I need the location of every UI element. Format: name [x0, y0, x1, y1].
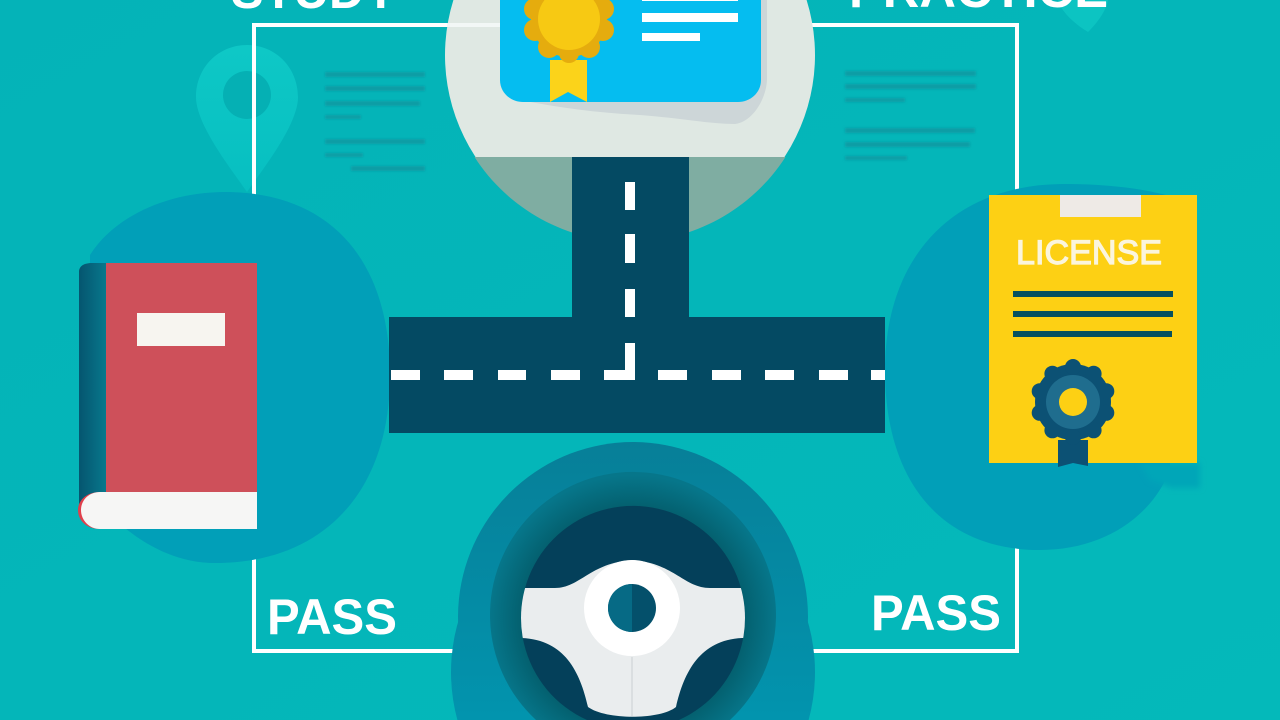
- label: pass right: PASS: [871, 585, 1001, 641]
- study text block (blurred): [325, 72, 425, 171]
- wheel spokes: [515, 560, 750, 717]
- book cover: [106, 263, 257, 494]
- wheel backdrop: [451, 442, 815, 720]
- book label: [137, 313, 225, 346]
- document ribbon: [1058, 440, 1088, 467]
- document sheet: [989, 195, 1197, 463]
- icon: faded location pin: [196, 45, 298, 192]
- book spine: [79, 263, 106, 510]
- wheel hub: [584, 560, 680, 656]
- wheel center: [608, 584, 656, 632]
- license title: LICENSE: [1016, 234, 1162, 272]
- wheel inner: [521, 506, 745, 720]
- document lines: [1013, 291, 1173, 337]
- icon: license document: [989, 195, 1197, 467]
- document clip: [1060, 195, 1141, 217]
- road: [389, 157, 885, 433]
- label: pass left: PASS: [267, 589, 397, 645]
- frame outline: [254, 25, 1017, 651]
- icon: steering wheel: [451, 442, 815, 720]
- icon: red book: [78, 263, 257, 529]
- icon: faded pin top right: [1058, 0, 1108, 32]
- id card: [500, 0, 761, 102]
- practice text block (blurred): [845, 71, 976, 160]
- card text lines: [642, 0, 738, 41]
- card shadow: [520, 0, 767, 124]
- book pages: [78, 492, 100, 529]
- top circle: id card: [445, 0, 815, 242]
- card ribbon: [550, 60, 587, 102]
- document shadow: [1140, 463, 1200, 488]
- road dashes: [391, 182, 885, 380]
- left circle: [90, 192, 390, 563]
- document seal: [1032, 359, 1114, 445]
- card seal: [524, 0, 614, 63]
- right circle: [885, 184, 1200, 550]
- wheel ring: [490, 472, 776, 720]
